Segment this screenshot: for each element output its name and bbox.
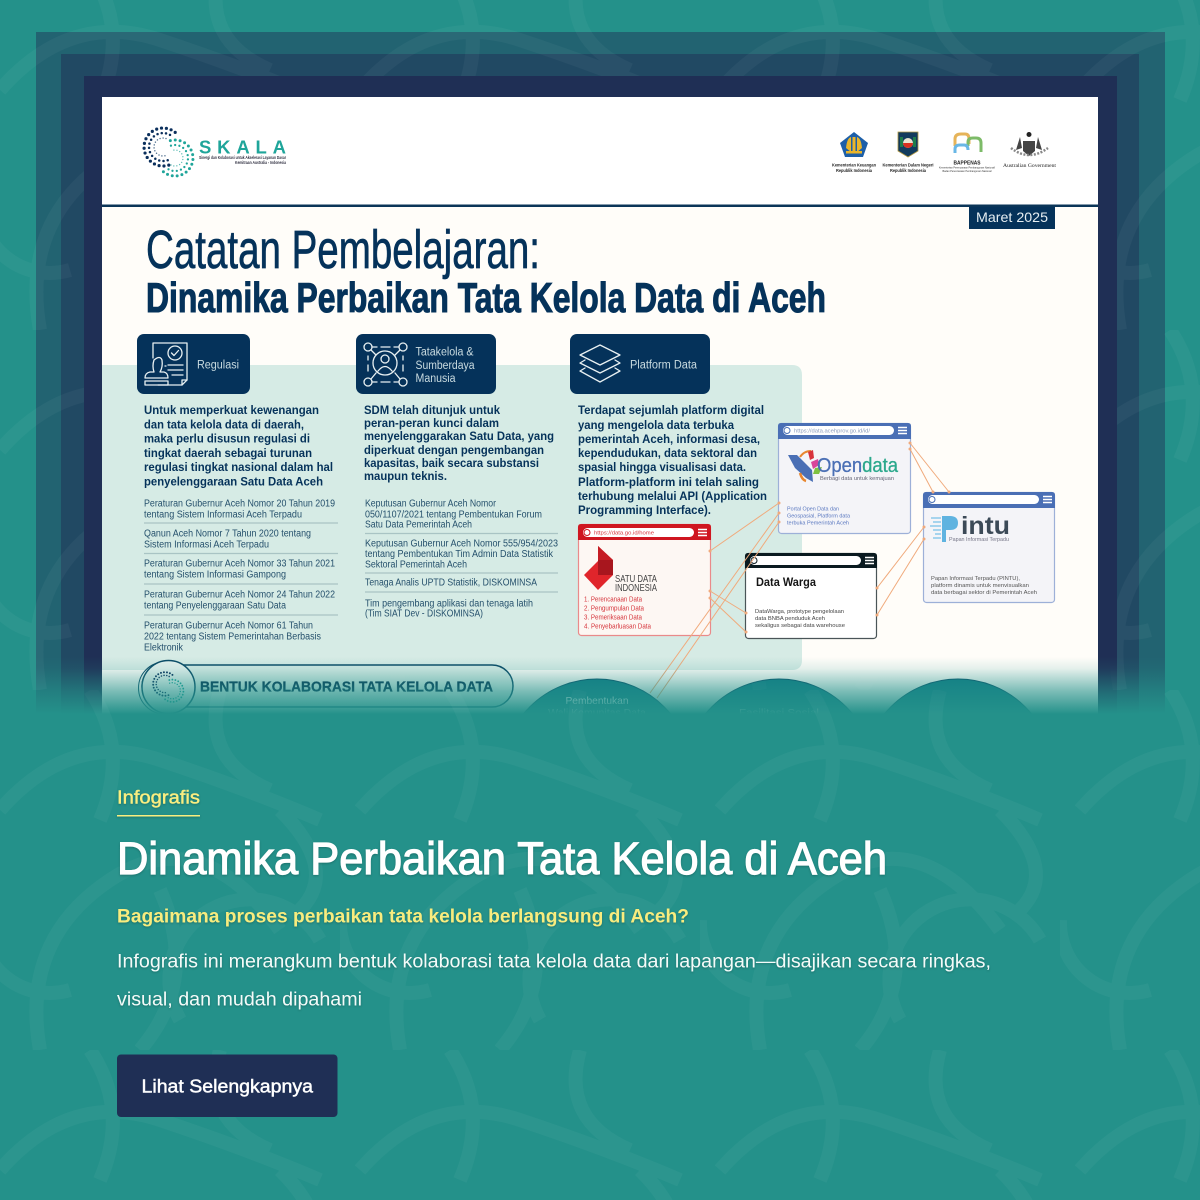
lead paragraph: [364, 403, 554, 483]
lead paragraph: kapasitas, baik secara substansi: [364, 456, 539, 470]
connector lines between platforms: [650, 442, 950, 698]
card: Satu Data Indonesia: 3. Pemeriksaan Data: [584, 614, 642, 622]
column: SDM text: [364, 403, 558, 620]
regulation list: Peraturan Gubernur Aceh Nomor 61 Tahun: [144, 620, 313, 632]
category label: [117, 786, 200, 816]
decree list: Keputusan Gubernur Aceh Nomor: [365, 498, 497, 510]
tab label: [416, 346, 475, 385]
lead paragraph: diperkuat dengan pengembangan: [364, 443, 544, 457]
category label: Infografis: [117, 786, 200, 808]
tab label: Platform Data: [630, 360, 698, 372]
icon: Bappenas: Badan Perencanaan Pembangunan Nasional: [942, 169, 992, 173]
card: Satu Data Indonesia: SATU DATA: [615, 573, 657, 585]
tab: Regulasi: [137, 334, 250, 394]
lead paragraph: dan tata kelola data di daerah,: [144, 418, 304, 432]
icon: Kementerian Dalam Negeri: Kementerian Dalam Negeri: [882, 162, 934, 168]
regulation list: Elektronik: [144, 642, 184, 654]
column: Platform text: terhubung melalui API (Application: [578, 489, 767, 503]
icon: Kementerian Dalam Negeri: [882, 132, 934, 173]
lead paragraph: Untuk memperkuat kewenangan: [144, 403, 319, 417]
icon: Kementerian Dalam Negeri: Republik Indonesia: [890, 168, 926, 173]
icon: people network: [364, 343, 407, 386]
tab label: Regulasi: [197, 360, 239, 372]
lead paragraph: maka perlu disusun regulasi di: [144, 432, 310, 446]
header band: [102, 204, 1098, 207]
icon: Kementerian Keuangan: Republik Indonesia: [836, 168, 872, 173]
column: Platform text: kependudukan, data sektoral dan: [578, 446, 757, 460]
date badge: Maret 2025: [976, 209, 1048, 225]
collaboration circles: Fasilitasi Sosial: [739, 707, 819, 719]
decree list: [365, 498, 558, 620]
description: [117, 952, 991, 1010]
card: Opendata: Opendata: [817, 455, 899, 477]
lead paragraph: maupun teknis.: [364, 469, 447, 483]
icon: Bappenas: Kementerian Perencanaan Pembangunan Nasional/: [939, 166, 995, 170]
collaboration circles: [525, 678, 1030, 712]
regulation list: Peraturan Gubernur Aceh Nomor 33 Tahun 2021: [144, 558, 335, 570]
card: Satu Data Indonesia: 2. Pengumpulan Data: [584, 606, 644, 612]
decree list: Tenaga Analis UPTD Statistik, DISKOMINSA: [365, 578, 537, 588]
icon: Australian coat of arms: Australian Government: [1003, 163, 1056, 169]
subheading: Bagaimana proses perbaikan tata kelola berlangsung di Aceh?: [117, 906, 689, 928]
panel: infographic preview: [102, 97, 1098, 712]
description: visual, dan mudah dipahami: [117, 990, 362, 1010]
icon: Kementerian Keuangan: [832, 132, 876, 173]
poster title: Dinamika Perbaikan Tata Kelola Data di Aceh: [146, 274, 826, 321]
card: Data Warga: DataWarga, prototype pengelolaan: [755, 609, 844, 615]
card: Satu Data Indonesia: [578, 524, 711, 636]
SKALA wordmark: Sinergi dan Kolaborasi untuk Akselerasi Layanan Dasar: [199, 155, 286, 160]
column: Regulasi text: [144, 403, 338, 654]
tab label: Manusia: [416, 373, 456, 385]
tab: Platform Data: [570, 334, 710, 394]
icon: small SKALA logo: [153, 672, 183, 702]
icon: Opendata map: [788, 450, 822, 482]
card: Opendata: terbuka Pemerintah Aceh: [787, 520, 849, 526]
decree list: Sektoral Pemerintah Aceh: [365, 560, 467, 570]
icon: stacked layers: [580, 345, 620, 382]
poster title: Catatan Pembelajaran:: [146, 220, 540, 280]
mint content panel: [102, 365, 802, 670]
lead paragraph: menyelenggarakan Satu Data, yang: [364, 429, 554, 443]
card: Opendata: https://data.acehprov.go.id/id/: [794, 428, 870, 434]
regulation list: tentang Sistem Informasi Aceh Terpadu: [144, 510, 302, 520]
partner logos: [832, 132, 1056, 173]
card: Opendata: Geospasial, Platform data: [787, 514, 851, 520]
column: Platform text: spasial hingga visualisasi data.: [578, 460, 746, 474]
decree list: (Tim SIAT Dev - DISKOMINSA): [365, 608, 483, 620]
column: Platform text: yang mengelola data terbuka: [578, 418, 734, 432]
column: Platform text: Platform-platform ini telah saling: [578, 475, 759, 489]
regulation list: [144, 498, 338, 654]
card: Pintu: [923, 492, 1055, 602]
card: Data Warga: sekaligus sebagai data warehouse: [755, 623, 845, 629]
regulation list: tentang Sistem Informasi Gampong: [144, 570, 286, 580]
icon: SKALA logo: [144, 128, 193, 176]
card: Pintu: intu: [961, 512, 1010, 540]
decree list: 050/1107/2021 tentang Pembentukan Forum: [365, 510, 542, 520]
decree list: Keputusan Gubernur Aceh Nomor 555/954/2023: [365, 538, 558, 550]
column: Platform text: [578, 403, 767, 517]
card: Satu Data Indonesia: INDONESIA: [615, 582, 657, 594]
icon: Australian coat of arms: [1003, 132, 1056, 169]
regulation list: Peraturan Gubernur Aceh Nomor 20 Tahun 2019: [144, 498, 335, 510]
button: Lihat Selengkapnya: [117, 1054, 338, 1117]
lead paragraph: SDM telah ditunjuk untuk: [364, 403, 500, 417]
card: Opendata: [778, 423, 911, 534]
button: Lihat Selengkapnya: Lihat Selengkapnya: [142, 1076, 314, 1096]
card: Opendata: Berbagi data untuk kemajuan: [820, 476, 894, 482]
card: Satu Data Indonesia: https://data.go.id/home: [594, 530, 654, 536]
collaboration circles: Wali Komunitas Data: [548, 707, 646, 719]
SKALA wordmark: SKALA: [199, 136, 286, 158]
regulation list: 2022 tentang Sistem Pemerintahan Berbasis: [144, 632, 321, 642]
card: Satu Data Indonesia: 4. Penyebarluasan Data: [584, 624, 651, 630]
card: Pintu: platform dinamis untuk menvisualkan: [931, 583, 1029, 589]
lead paragraph: [144, 403, 333, 488]
card: Data Warga: data BNBA penduduk Aceh: [755, 616, 825, 622]
card: Pintu: Papan Informasi Terpadu: [949, 537, 1009, 543]
layered navy frame: [36, 32, 1165, 722]
regulation list: tentang Penyelenggaraan Satu Data: [144, 600, 286, 612]
icon: Bappenas: BAPPENAS: [954, 160, 981, 166]
tab label: Tatakelola &: [416, 346, 474, 358]
column: Platform text: Terdapat sejumlah platform digital: [578, 403, 764, 417]
regulation list: Peraturan Gubernur Aceh Nomor 24 Tahun 2022: [144, 590, 335, 600]
lead paragraph: tingkat daerah sebagai turunan: [144, 446, 312, 460]
fade overlay: [0, 657, 1200, 714]
card: Pintu: data berbagai sektor di Pemerintah Aceh: [931, 590, 1037, 596]
infographic paper: [102, 207, 1098, 712]
card: Opendata: Portal Open Data dan: [787, 506, 839, 512]
decree list: Satu Data Pemerintah Aceh: [365, 520, 472, 530]
card: Pintu: Papan Informasi Terpadu (PINTU),: [931, 576, 1020, 582]
icon: Satu Data diamond: [584, 546, 613, 590]
description: Infografis ini merangkum bentuk kolaborasi tata kelola data dari lapangan—disajikan secara ringkas,: [117, 952, 991, 972]
lead paragraph: peran-peran kunci dalam: [364, 416, 499, 430]
poster title: [148, 228, 824, 313]
SKALA wordmark: [199, 140, 286, 164]
icon: stamp and document: [145, 343, 187, 385]
regulation list: Sistem Informasi Aceh Terpadu: [144, 540, 269, 550]
decree list: Tim pengembang aplikasi dan tenaga latih: [365, 598, 533, 610]
section banner: Bentuk Kolaborasi: [138, 660, 513, 714]
card: Data Warga: [745, 553, 877, 638]
icon: Bappenas: [939, 134, 995, 173]
card: Satu Data Indonesia: 1. Perencanaan Data: [584, 596, 642, 604]
lead paragraph: penyelenggaraan Satu Data Aceh: [144, 474, 323, 488]
tab label: Sumberdaya: [416, 360, 475, 372]
section banner: Bentuk Kolaborasi: BENTUK KOLABORASI TATA KELOLA DATA: [200, 680, 493, 696]
card: Data Warga: Data Warga: [756, 575, 816, 589]
column: Platform text: pemerintah Aceh, informasi desa,: [578, 432, 760, 446]
headline: Dinamika Perbaikan Tata Kelola di Aceh: [117, 833, 887, 884]
regulation list: Qanun Aceh Nomor 7 Tahun 2020 tentang: [144, 528, 311, 540]
lead paragraph: regulasi tingkat nasional dalam hal: [144, 460, 333, 474]
decree list: tentang Pembentukan Tim Admin Data Statistik: [365, 549, 554, 560]
icon: Pintu mark: [930, 516, 958, 542]
collaboration circles: Pembentukan: [566, 695, 629, 707]
tab: Tatakelola dan SDM: [356, 334, 496, 394]
date badge: [969, 207, 1055, 229]
column: Platform text: Programming Interface).: [578, 503, 711, 517]
icon: Kementerian Keuangan: Kementerian Keuangan: [832, 162, 876, 168]
SKALA wordmark: Kemitraan Australia - Indonesia: [235, 160, 287, 165]
